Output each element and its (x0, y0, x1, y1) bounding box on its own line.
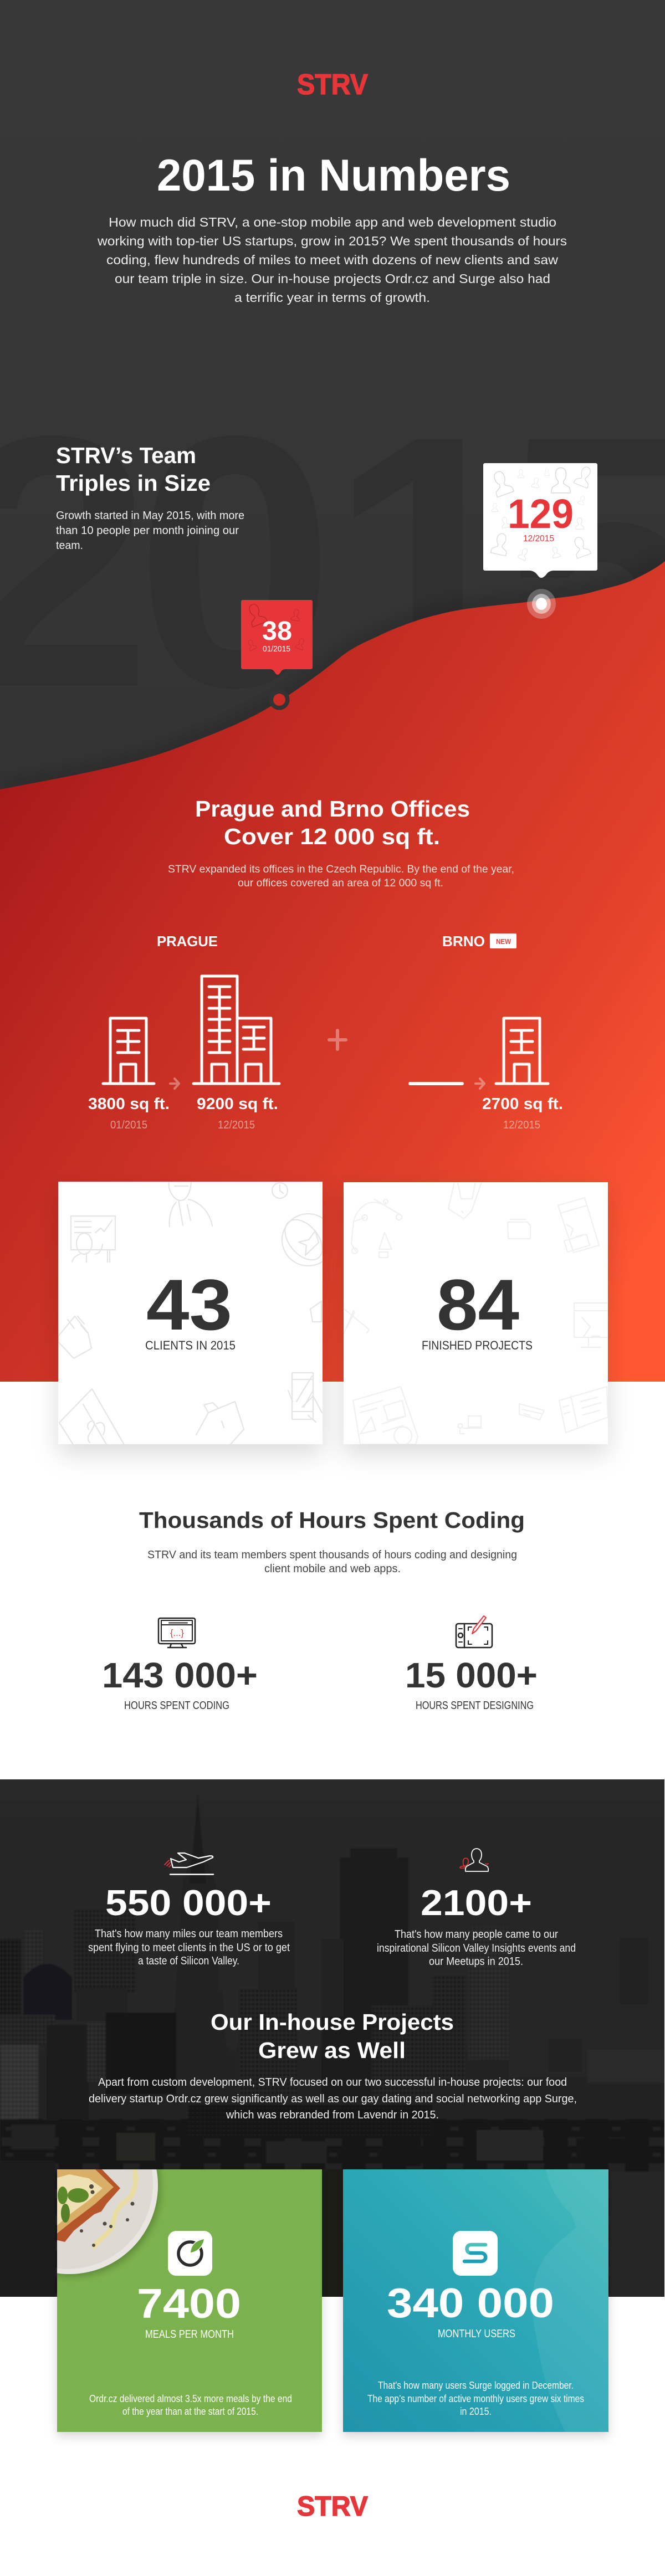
panel: Ordr.cz card: of the year than at the start of 2015. (122, 2406, 258, 2417)
callout: 38 people in 01/2015 (241, 600, 313, 675)
arrow: Prague growth (170, 1079, 179, 1089)
icon: Prague building January (103, 1018, 154, 1084)
callout: 129 people in 12/2015: 12/2015 (523, 534, 554, 543)
callout: 129 people in 12/2015: 129 (508, 491, 574, 537)
marker: January point (269, 689, 289, 710)
heading: team triples: Triples in Size (56, 470, 211, 496)
panel: Surge card (343, 2169, 608, 2432)
stat: 3800 sq ft (88, 1095, 170, 1131)
stat: event visitors: That's how many people came to our (395, 1928, 558, 1941)
in-house text: which was rebranded from Lavendr in 2015. (226, 2109, 439, 2121)
panel: projects card: 84 (437, 1264, 519, 1345)
panel: Surge card: 340 000 (387, 2280, 554, 2326)
stat: 9200 sq ft: 9200 sq ft. (197, 1095, 278, 1113)
heading: in-house projects: Grew as Well (258, 2038, 406, 2063)
stat: 2700 sq ft: 12/2015 (503, 1119, 540, 1131)
stat: miles flown (88, 1882, 290, 1967)
stat: event visitors: inspirational Silicon Valley Insights events and (377, 1942, 576, 1954)
intro paragraph: working with top-tier US startups, grow in 2015? We spent thousands of hours (97, 234, 567, 248)
label: Prague: PRAGUE (157, 933, 218, 950)
image: man silhouette (533, 2169, 608, 2432)
intro paragraph: How much did STRV, a one-stop mobile app and web development studio (109, 215, 556, 229)
heading: in-house projects (211, 2009, 454, 2063)
heading: offices (195, 796, 470, 849)
in-house text: delivery startup Ordr.cz grew significantly as well as our gay dating and social networking app Surge, (89, 2093, 577, 2105)
offices text: STRV expanded its offices in the Czech Republic. By the end of the year, (168, 864, 514, 875)
icon: Surge app (453, 2231, 498, 2276)
heading: team triples: STRV’s Team (56, 443, 196, 468)
panel: city skyline background (0, 1767, 665, 2310)
stat: miles flown: spent flying to meet clients in the US or to get (88, 1942, 290, 1954)
hours coding text: STRV and its team members spent thousands of hours coding and designing (147, 1549, 517, 1561)
panel: Ordr.cz card: MEALS PER MONTH (145, 2328, 234, 2341)
heading: in-house projects: Our In-house Projects (211, 2009, 454, 2035)
team growth text (56, 510, 244, 552)
panel: Surge card: MONTHLY USERS (438, 2328, 515, 2340)
in-house text (89, 2076, 577, 2121)
panel: clients card: 43 (146, 1264, 232, 1345)
icon: Brno building (496, 1018, 548, 1084)
stat: hours designing: HOURS SPENT DESIGNING (416, 1700, 534, 1712)
stat: 2700 sq ft: 2700 sq ft. (482, 1095, 563, 1113)
logo: STRV top: STRV (297, 69, 368, 101)
heading: offices: Prague and Brno Offices (195, 796, 470, 822)
stat: miles flown: That's how many miles our team members (95, 1928, 283, 1940)
in-house text: Apart from custom development, STRV focused on our two successful in-house projects: our food (98, 2076, 567, 2088)
icon: people at events (460, 1849, 488, 1871)
stat: event visitors: our Meetups in 2015. (429, 1956, 523, 1968)
panel: projects card (344, 1182, 608, 1445)
team growth text: team. (56, 540, 83, 552)
callout: 38 people in 01/2015: 01/2015 (263, 644, 290, 654)
stat: event visitors (377, 1882, 576, 1968)
title: 2015 in Numbers (157, 151, 510, 201)
stat: 2700 sq ft (482, 1095, 563, 1131)
background numerals 2015 (0, 362, 665, 761)
stat: miles flown: 550 000+ (105, 1882, 272, 1923)
panel: Ordr.cz card: 7400 (137, 2280, 241, 2327)
stat: event visitors: 2100+ (421, 1882, 532, 1923)
curve shadow (0, 561, 665, 789)
heading: team triples (56, 443, 211, 496)
team growth text: than 10 people per month joining our (56, 525, 239, 537)
panel: Surge card: That's how many users Surge logged in December. (378, 2380, 574, 2391)
icon: Ordr app (168, 2231, 212, 2276)
team growth text: Growth started in May 2015, with more (56, 510, 244, 522)
panel: red gradient area with curve (0, 561, 665, 1382)
callout: 129 people in 12/2015 (483, 463, 597, 578)
label: Brno with new badge: BRNO (442, 933, 485, 950)
icon: Prague buildings December (193, 976, 279, 1084)
stat: hours designing (405, 1655, 538, 1712)
icon: monitor with code (158, 1618, 195, 1648)
background numerals 2015: 1 (330, 362, 529, 761)
heading: offices: Cover 12 000 sq ft. (224, 824, 440, 849)
stat: 3800 sq ft: 3800 sq ft. (88, 1095, 170, 1113)
panel: Surge card: The app’s number of active monthly users grew six times (367, 2393, 584, 2404)
marker: December point (527, 589, 556, 619)
heading: hours coding: Thousands of Hours Spent Coding (139, 1507, 525, 1533)
panel: clients card (58, 1182, 334, 1474)
logo: STRV bottom: STRV (297, 2491, 369, 2522)
intro paragraph: coding, flew hundreds of miles to meet with dozens of new clients and saw (106, 253, 558, 267)
panel: Surge card: in 2015. (460, 2406, 492, 2417)
intro paragraph (97, 215, 567, 305)
stat: hours designing: 15 000+ (405, 1655, 538, 1695)
arrow: Brno growth (475, 1079, 484, 1089)
icon: plane taking off (165, 1853, 213, 1875)
intro paragraph: our team triple in size. Our in-house projects Ordr.cz and Surge also had (115, 271, 550, 286)
panel: clients card: CLIENTS IN 2015 (145, 1338, 236, 1352)
stat: 9200 sq ft (197, 1095, 278, 1131)
icon: drawing tablet (456, 1616, 492, 1648)
stat: miles flown: a taste of Silicon Valley. (138, 1955, 239, 1967)
stat: hours coding: HOURS SPENT CODING (124, 1700, 229, 1712)
dash: no Brno office before (410, 1082, 462, 1085)
plus sign (329, 1030, 346, 1049)
intro paragraph: a terrific year in terms of growth. (234, 290, 430, 305)
stat: hours coding (102, 1655, 258, 1712)
image: plate with lasagna (57, 2169, 163, 2280)
hours coding text: client mobile and web apps. (264, 1563, 401, 1575)
label: Brno with new badge (442, 933, 516, 950)
stat: hours coding: 143 000+ (102, 1655, 258, 1695)
stat: 3800 sq ft: 01/2015 (110, 1119, 147, 1131)
stat: 9200 sq ft: 12/2015 (218, 1119, 255, 1131)
background numerals 2015: 0 (136, 362, 335, 761)
icon: monitor with code: {...} (170, 1628, 184, 1638)
panel: Ordr.cz card (53, 2169, 326, 2441)
offices text (168, 864, 514, 889)
panel: Ordr.cz card: Ordr.cz delivered almost 3.5x more meals by the end (89, 2393, 292, 2404)
hours coding text (147, 1549, 517, 1575)
offices text: our offices covered an area of 12 000 sq ft. (238, 878, 443, 889)
panel: projects card: FINISHED PROJECTS (422, 1338, 533, 1352)
label: Brno with new badge: NEW (496, 937, 511, 946)
callout: 38 people in 01/2015: 38 (262, 617, 292, 646)
panel: dark header background (0, 0, 665, 798)
